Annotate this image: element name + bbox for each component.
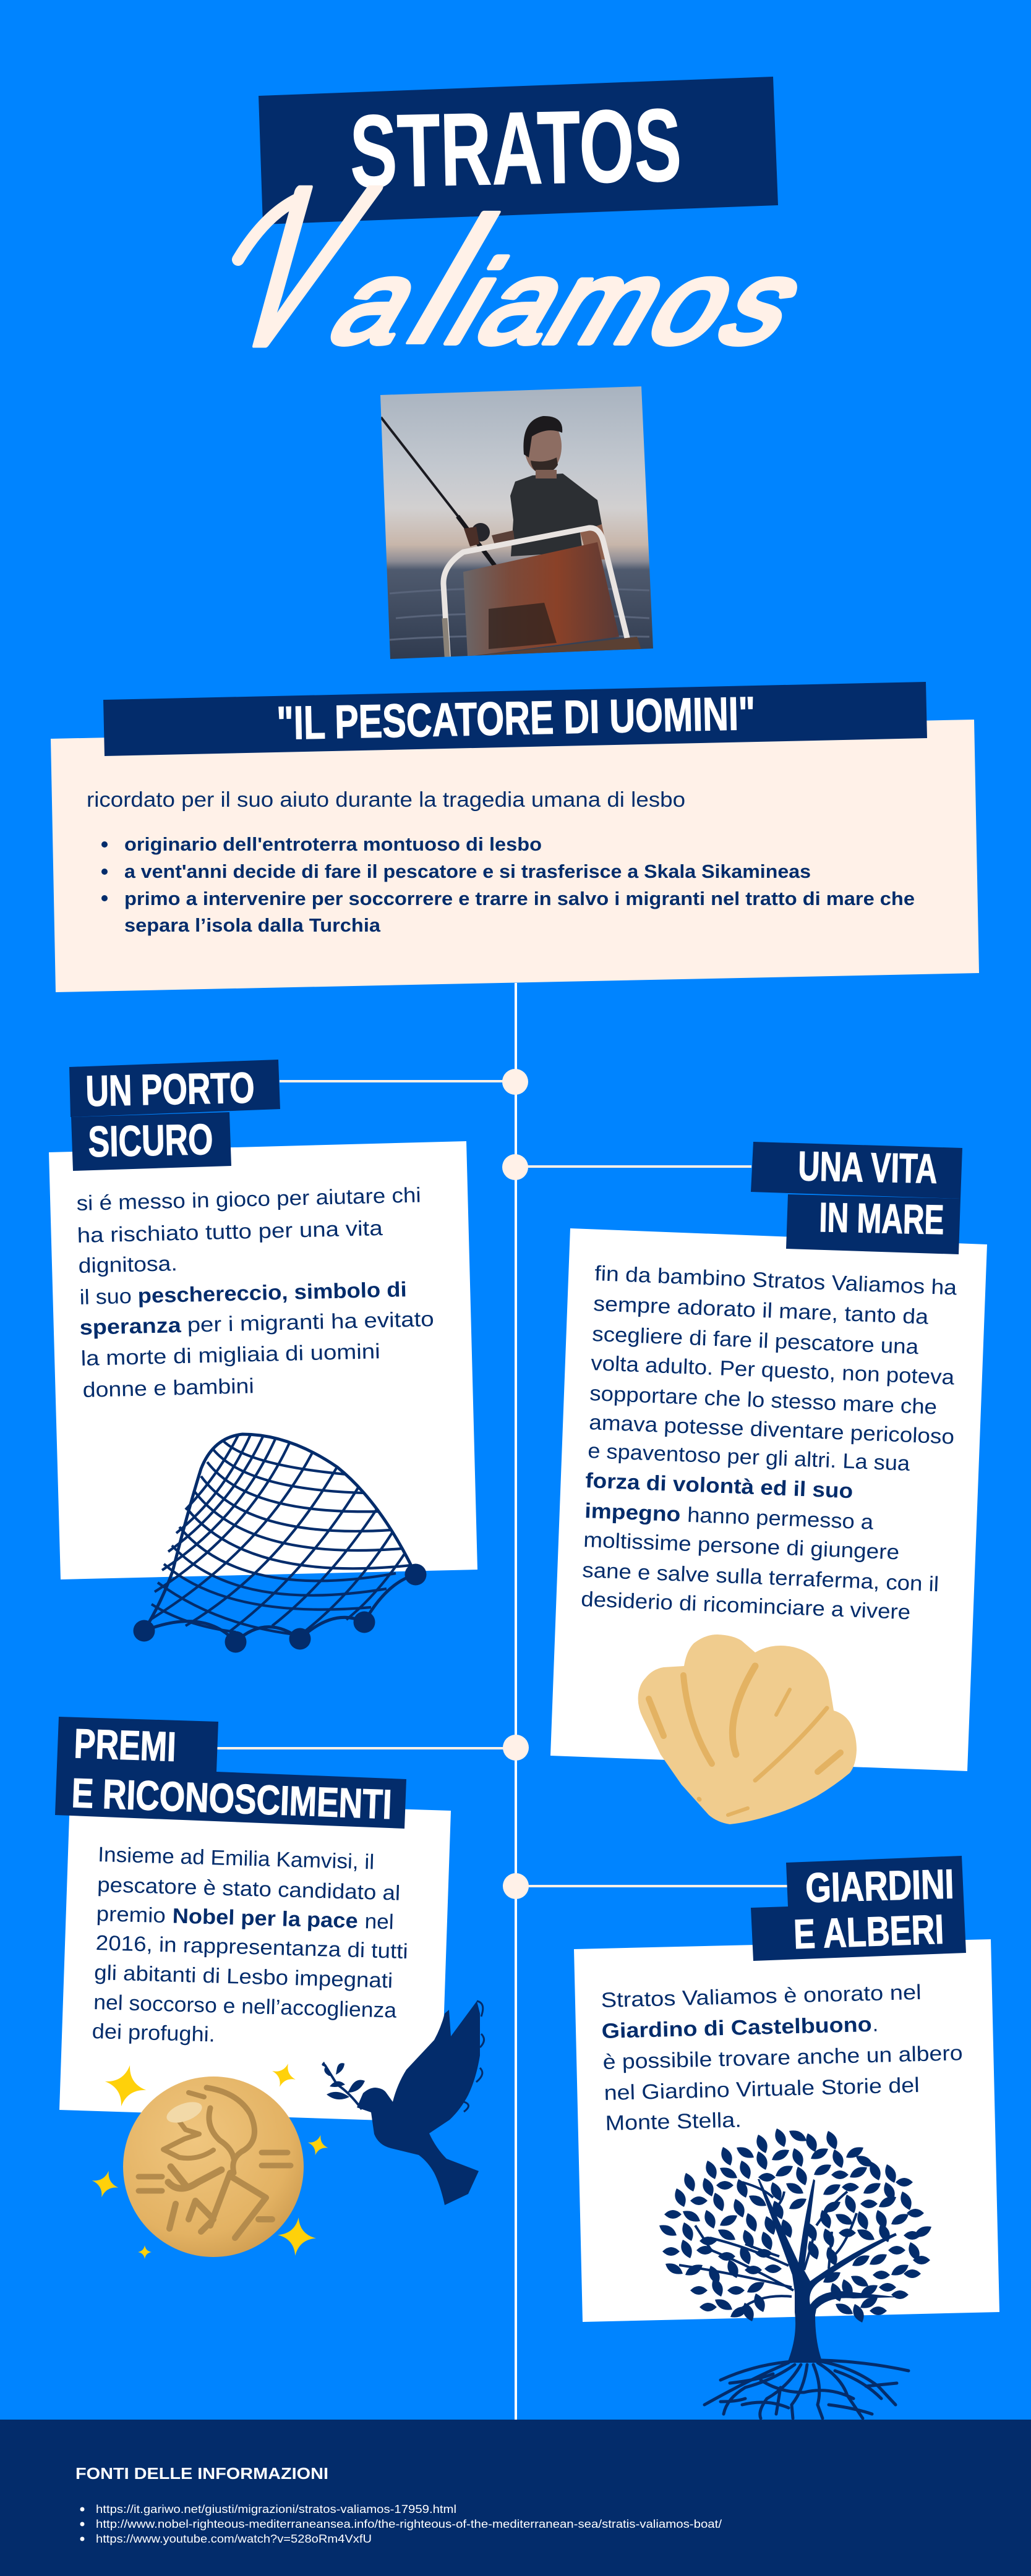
body text: scegliere di fare il pescatore una [592, 1322, 919, 1359]
panel background [59, 1798, 451, 2122]
title: Valiamos: a [455, 237, 597, 368]
sources list: https://it.gariwo.net/giusti/migrazioni/stratos-valiamos-17959.html [96, 2503, 456, 2515]
body text: hanno permesso a [687, 1503, 874, 1534]
body text: e spaventoso per gli altri. La sua [588, 1439, 910, 1476]
body text: nel soccorso e nell’accoglienza [93, 1991, 397, 2023]
heading: UNA VITA [798, 1143, 938, 1192]
body text: forza di volontà ed il suo [585, 1469, 853, 1503]
body text: pescatore è stato candidato al [97, 1873, 401, 1905]
body text: fin da bambino Stratos Valiamos ha [594, 1262, 957, 1300]
panel: una vita in mare [550, 1142, 987, 1824]
panel: giardini e alberi [574, 1856, 999, 2418]
panel background [51, 720, 979, 992]
panel: il pescatore di uomini [51, 682, 979, 992]
body text: impegno [584, 1499, 681, 1526]
body text [581, 1262, 957, 1624]
body text: Stratos Valiamos è onorato nel [601, 1981, 922, 2012]
body text: 2016, in rappresentanza di tutti [95, 1931, 408, 1963]
body text: dignitosa. [78, 1252, 178, 1278]
icon: stars [88, 2059, 331, 2259]
body text: il suo [79, 1285, 132, 1309]
icon: fishing net [134, 1434, 427, 1653]
body text: Giardino di Castelbuono [601, 2013, 872, 2043]
panel background [550, 1228, 987, 1771]
panel: premi e riconoscimenti [55, 1717, 484, 2259]
heading [798, 1143, 944, 1243]
body text: amava potesse diventare pericoloso [589, 1411, 955, 1449]
panel background [49, 1141, 477, 1579]
footer: fonti delle informazioni [0, 2420, 1031, 2576]
body text: sempre adorato il mare, tanto da [593, 1292, 929, 1329]
sources list: http://www.nobel-righteous-mediterraneansea.info/the-righteous-of-the-mediterranean-sea/stratis-valiamos-boat/ [96, 2518, 722, 2530]
title: Valiamos: l [374, 181, 529, 381]
intro text: ricordato per il suo aiuto durante la tragedia umana di lesbo [87, 788, 685, 812]
body text [92, 1843, 408, 2047]
heading: UN PORTO [85, 1063, 255, 1115]
heading banner [55, 1717, 406, 1829]
title: Valiamos: s [696, 237, 831, 368]
heading: SICURO [88, 1115, 213, 1166]
body text [601, 1981, 963, 2135]
body text: donne e bambini [82, 1374, 254, 1402]
tree branches [679, 2182, 857, 2309]
body text: Monte Stella. [605, 2108, 742, 2135]
heading banner [751, 1856, 966, 1961]
body text: speranza [79, 1314, 182, 1340]
title banner [259, 77, 778, 224]
tree leaves [659, 2128, 931, 2323]
body text: Insieme ad Emilia Kamvisi, il [98, 1843, 375, 1874]
panel background [574, 1939, 999, 2322]
tree roots [704, 2360, 909, 2418]
title [195, 77, 863, 392]
heading: E RICONOSCIMENTI [71, 1770, 393, 1828]
heading banner [751, 1142, 962, 1254]
title: Valiamos: i [424, 237, 526, 368]
bullet list: primo a intervenire per soccorrere e trarre in salvo i migranti nel tratto di mare che [124, 888, 915, 909]
heading: IN MARE [819, 1194, 944, 1243]
body text: si é messo in gioco per aiutare chi [76, 1183, 421, 1215]
title: Valiamos: V [195, 141, 406, 392]
body text [76, 1183, 434, 1402]
icon: seashell [638, 1634, 857, 1824]
heading banner [103, 682, 927, 756]
heading [793, 1861, 954, 1958]
heading: PREMI [73, 1720, 177, 1770]
body text: desiderio di ricominciare a vivere [581, 1588, 911, 1624]
body text: sane e salve sulla terraferma, con il [582, 1558, 939, 1596]
body text: nel Giardino Virtuale Storie del [604, 2073, 920, 2105]
heading: GIARDINI [805, 1861, 954, 1911]
title: Valiamos: o [625, 237, 766, 368]
body text: nel [364, 1910, 394, 1934]
bullet list: originario dell'entroterra montuoso di lesbo [124, 833, 542, 855]
body text: sopportare che lo stesso mare che [589, 1382, 938, 1419]
body text: la morte di migliaia di uomini [80, 1340, 380, 1371]
icon: dove with olive branch [322, 2001, 484, 2205]
heading: "IL PESCATORE DI UOMINI" [276, 687, 756, 750]
heading: E ALBERI [793, 1906, 944, 1958]
body text: volta adulto. Per questo, non poteva [591, 1351, 955, 1390]
footer heading: FONTI DELLE INFORMAZIONI [75, 2464, 328, 2483]
body text: . [872, 2013, 879, 2036]
body text: Nobel per la pace [172, 1904, 358, 1933]
heading [85, 1063, 255, 1166]
body text: premio [96, 1902, 166, 1928]
bullet list [101, 833, 915, 936]
body text: per i migranti ha evitato [187, 1307, 434, 1337]
panel: un porto sicuro [49, 1060, 477, 1653]
sources list [80, 2503, 722, 2545]
sources list: https://www.youtube.com/watch?v=528oRm4VxfU [96, 2533, 372, 2545]
body text: gli abitanti di Lesbo impegnati [94, 1961, 393, 1992]
bullet list: separa l’isola dalla Turchia [124, 914, 381, 936]
title: Valiamos [195, 141, 863, 392]
body text: moltissime persone di giungere [583, 1528, 900, 1565]
heading [71, 1720, 393, 1828]
body text: dei profughi. [92, 2020, 215, 2047]
title: Stratos: STRATOS [349, 88, 683, 210]
bullet list: a vent'anni decide di fare il pescatore e si trasferisce a Skala Sikamineas [124, 861, 811, 882]
title: Valiamos: a [308, 237, 450, 368]
title: Valiamos: m [522, 237, 696, 368]
icon: tree with roots [659, 2128, 931, 2418]
photo: Stratos Valiamos fishing [380, 386, 653, 659]
icon: nobel medal [123, 2077, 304, 2257]
tree trunk [758, 2179, 900, 2363]
timeline [217, 983, 787, 2421]
footer background [0, 2420, 1031, 2576]
heading banner [69, 1060, 280, 1171]
body text: peschereccio, simbolo di [137, 1278, 407, 1308]
body text: ha rischiato tutto per una vita [77, 1217, 383, 1248]
title flourish [238, 198, 301, 260]
body text: è possibile trovare anche un albero [602, 2041, 963, 2074]
